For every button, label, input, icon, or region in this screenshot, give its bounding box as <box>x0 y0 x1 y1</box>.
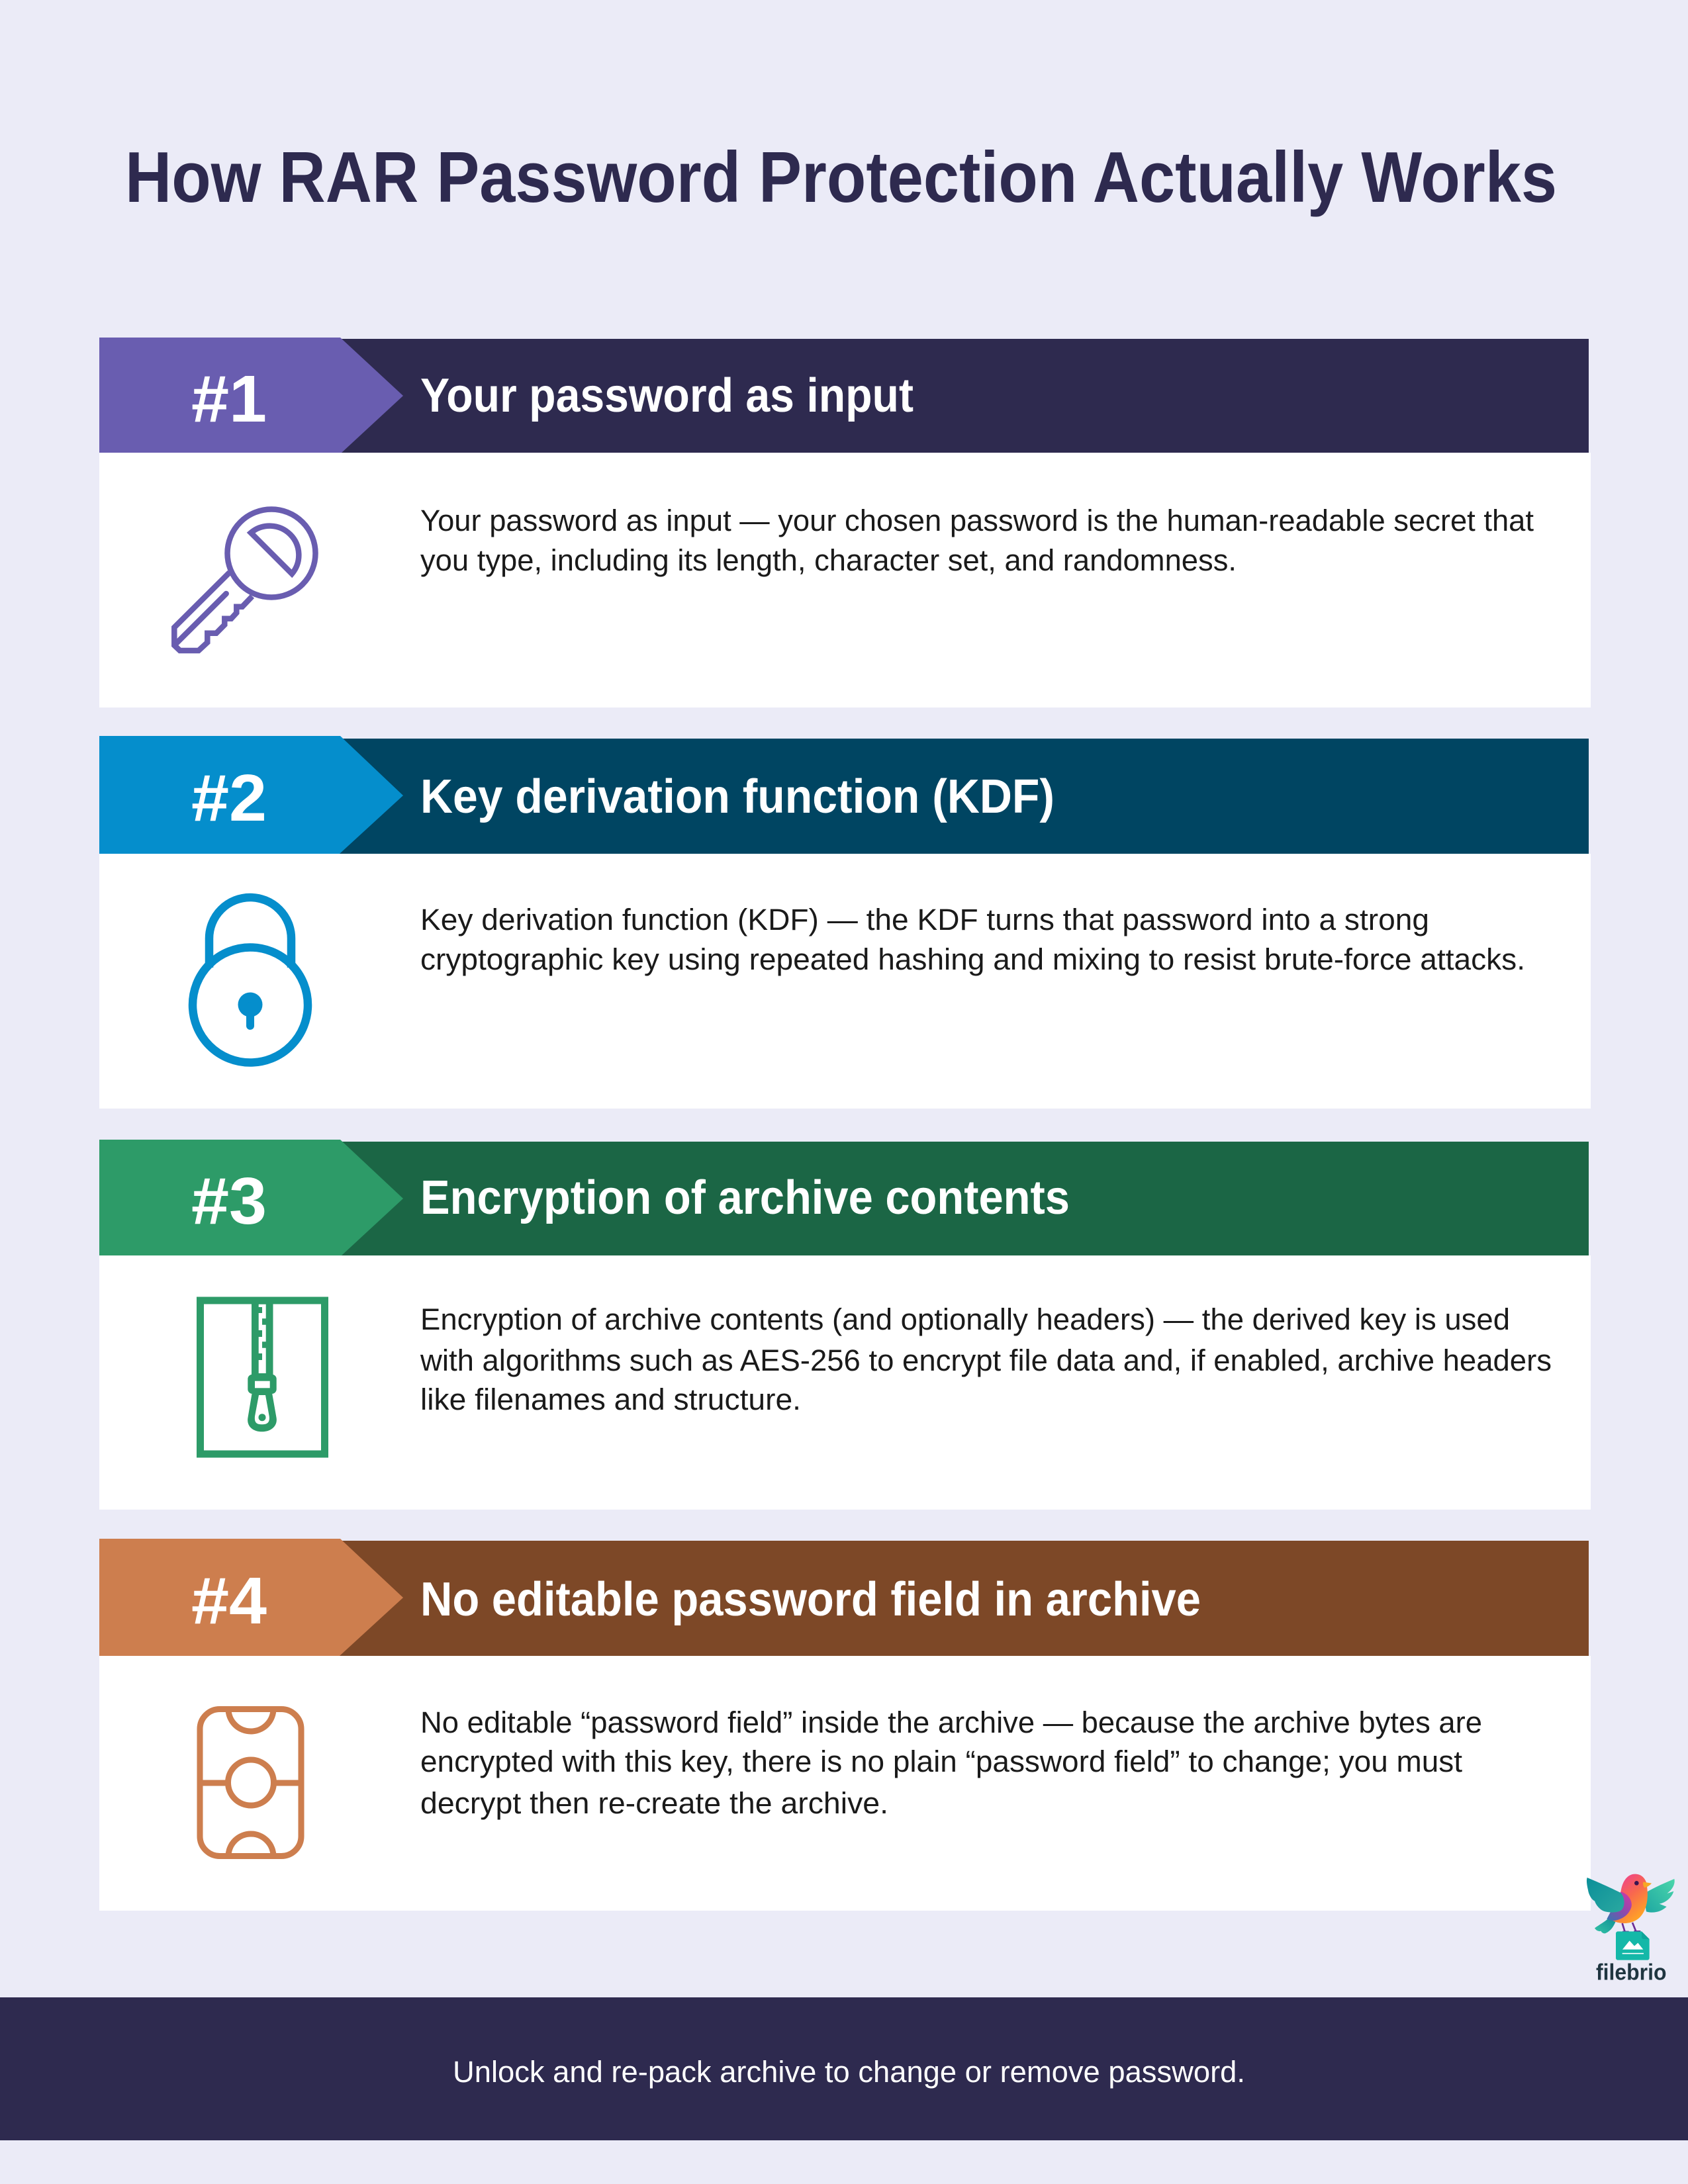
footer band <box>0 1997 1688 2140</box>
body text 1: you type, including its length, character set, and randomness. <box>420 543 1237 577</box>
brand name: filebrio <box>1596 1960 1667 1985</box>
header bar 1 <box>338 339 1589 453</box>
body text 3: with algorithms such as AES-256 to encrypt file data and, if enabled, archive headers <box>420 1343 1552 1377</box>
body text 4: encrypted with this key, there is no plain “password field” to change; you must <box>420 1745 1463 1778</box>
icon: rink field <box>200 1709 301 1856</box>
body text 3: Encryption of archive contents (and optionally headers) — the derived key is used <box>420 1302 1510 1336</box>
icon: key <box>174 510 315 651</box>
heading 2: Key derivation function (KDF) <box>420 770 1055 823</box>
number 2: #2 <box>191 761 267 835</box>
panel: step 2 <box>99 736 1591 1109</box>
bird and document mark <box>1587 1874 1675 1960</box>
icon: padlock <box>193 897 308 1063</box>
heading 3: Encryption of archive contents <box>420 1171 1070 1224</box>
panel: step 3 <box>99 1140 1591 1510</box>
body text 1: Your password as input — your chosen password is the human-readable secret that <box>420 504 1534 537</box>
footer text: Unlock and re-pack archive to change or remove password. <box>453 2055 1245 2089</box>
card body 1 <box>99 453 1591 707</box>
number 4: #4 <box>191 1564 267 1638</box>
chevron badge 2 <box>99 736 403 854</box>
panel: step 4 <box>99 1539 1591 1911</box>
body text 4 <box>420 1706 1482 1820</box>
chevron badge 3 <box>99 1140 403 1255</box>
body text 4: decrypt then re-create the archive. <box>420 1786 888 1820</box>
card body 2 <box>99 854 1591 1109</box>
title: How RAR Password Protection Actually Works <box>125 137 1557 218</box>
icon: zipper <box>200 1300 324 1454</box>
heading 4: No editable password field in archive <box>420 1573 1201 1626</box>
header bar 4 <box>338 1541 1589 1656</box>
body text 2: Key derivation function (KDF) — the KDF turns that password into a strong <box>420 903 1429 936</box>
body text 2: cryptographic key using repeated hashing and mixing to resist brute-force attacks. <box>420 942 1525 976</box>
chevron badge 4 <box>99 1539 403 1656</box>
number 1: #1 <box>191 362 267 436</box>
body text 3 <box>420 1302 1552 1416</box>
header bar 2 <box>338 739 1589 854</box>
chevron badge 1 <box>99 338 403 453</box>
card body 3 <box>99 1255 1591 1510</box>
body text 2 <box>420 903 1525 976</box>
body text 3: like filenames and structure. <box>420 1383 801 1416</box>
card body 4 <box>99 1656 1591 1911</box>
panel: step 1 <box>99 338 1591 707</box>
logo: filebrio bird <box>1587 1874 1675 1985</box>
body text 4: No editable “password field” inside the archive — because the archive bytes are <box>420 1706 1482 1739</box>
header bar 3 <box>338 1142 1589 1255</box>
heading 1: Your password as input <box>420 369 914 422</box>
body text 1 <box>420 504 1534 577</box>
number 3: #3 <box>191 1164 267 1238</box>
